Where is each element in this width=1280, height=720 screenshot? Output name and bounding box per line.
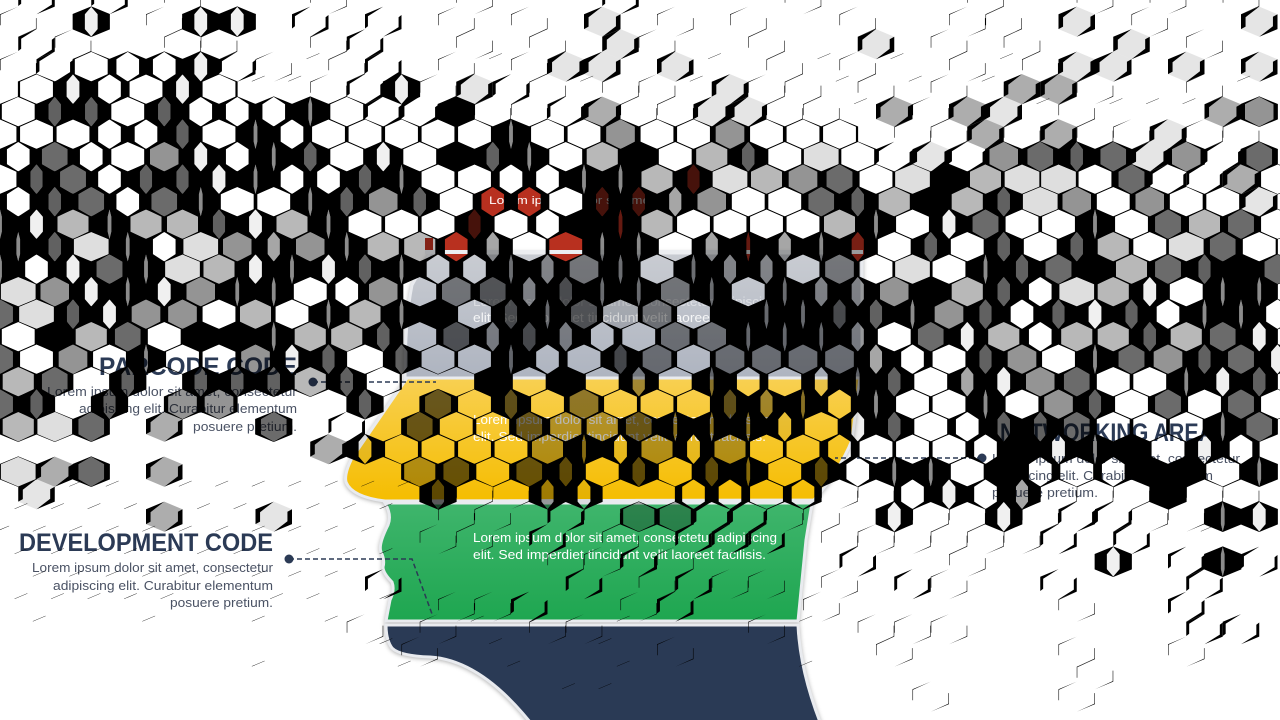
body text: Lorem ipsum dolor sit amet, consectetur <box>992 451 1241 466</box>
yellow band text <box>473 412 777 444</box>
silver band text: elit. Sed imperdiet tincidunt velit laoreet facilisis. <box>473 310 766 325</box>
body text <box>47 384 298 434</box>
head silhouette <box>346 253 862 720</box>
callout: networking area label <box>835 419 1241 500</box>
body text: posuere pretium. <box>992 485 1098 500</box>
callout: upper left label <box>47 353 436 434</box>
panel: green band <box>380 503 812 621</box>
connector <box>835 454 986 462</box>
connector <box>308 378 436 386</box>
silver band text: Lorem ipsum dolor sit amet, consectetur adipiscing <box>473 294 777 309</box>
body text: adipiscing elit. Curabitur elementum <box>79 401 297 416</box>
red crown edge at left <box>425 238 433 251</box>
heading: NETWORKING AREA <box>1000 419 1214 447</box>
panel: red crown cells <box>456 179 858 247</box>
silver band text <box>473 294 777 325</box>
green band text: elit. Sed imperdiet tincidunt velit laoreet facilisis. <box>473 547 766 562</box>
body text: adipiscing elit. Curabitur elementum <box>992 468 1213 483</box>
green band text: Lorem ipsum dolor sit amet, consectetur adipiscing <box>473 530 777 545</box>
panel: yellow band <box>346 378 860 501</box>
body text: Lorem ipsum dolor sit amet, consectetur <box>47 384 298 399</box>
body text: posuere pretium. <box>193 419 297 434</box>
body text: posuere pretium. <box>170 595 273 610</box>
heading: PARCODE CODE <box>99 353 297 381</box>
callout: development code label <box>19 529 432 614</box>
body text <box>32 560 274 610</box>
body text <box>992 451 1241 500</box>
panel: silver band <box>405 253 862 378</box>
heading: DEVELOPMENT CODE <box>19 529 273 557</box>
connector <box>284 554 432 614</box>
panel: navy neck <box>386 625 820 720</box>
body text: adipiscing elit. Curabitur elementum <box>53 578 273 593</box>
yellow band text: Lorem ipsum dolor sit amet, consectetur adipiscing <box>473 412 777 427</box>
body text: Lorem ipsum dolor sit amet, consectetur <box>32 560 274 575</box>
white separator under crown <box>425 250 863 254</box>
green band text <box>473 530 777 562</box>
red band text: Lorem ipsum dolor sit amet <box>489 195 654 207</box>
yellow band text: elit. Sed imperdiet tincidunt velit laoreet facilisis. <box>473 429 766 444</box>
